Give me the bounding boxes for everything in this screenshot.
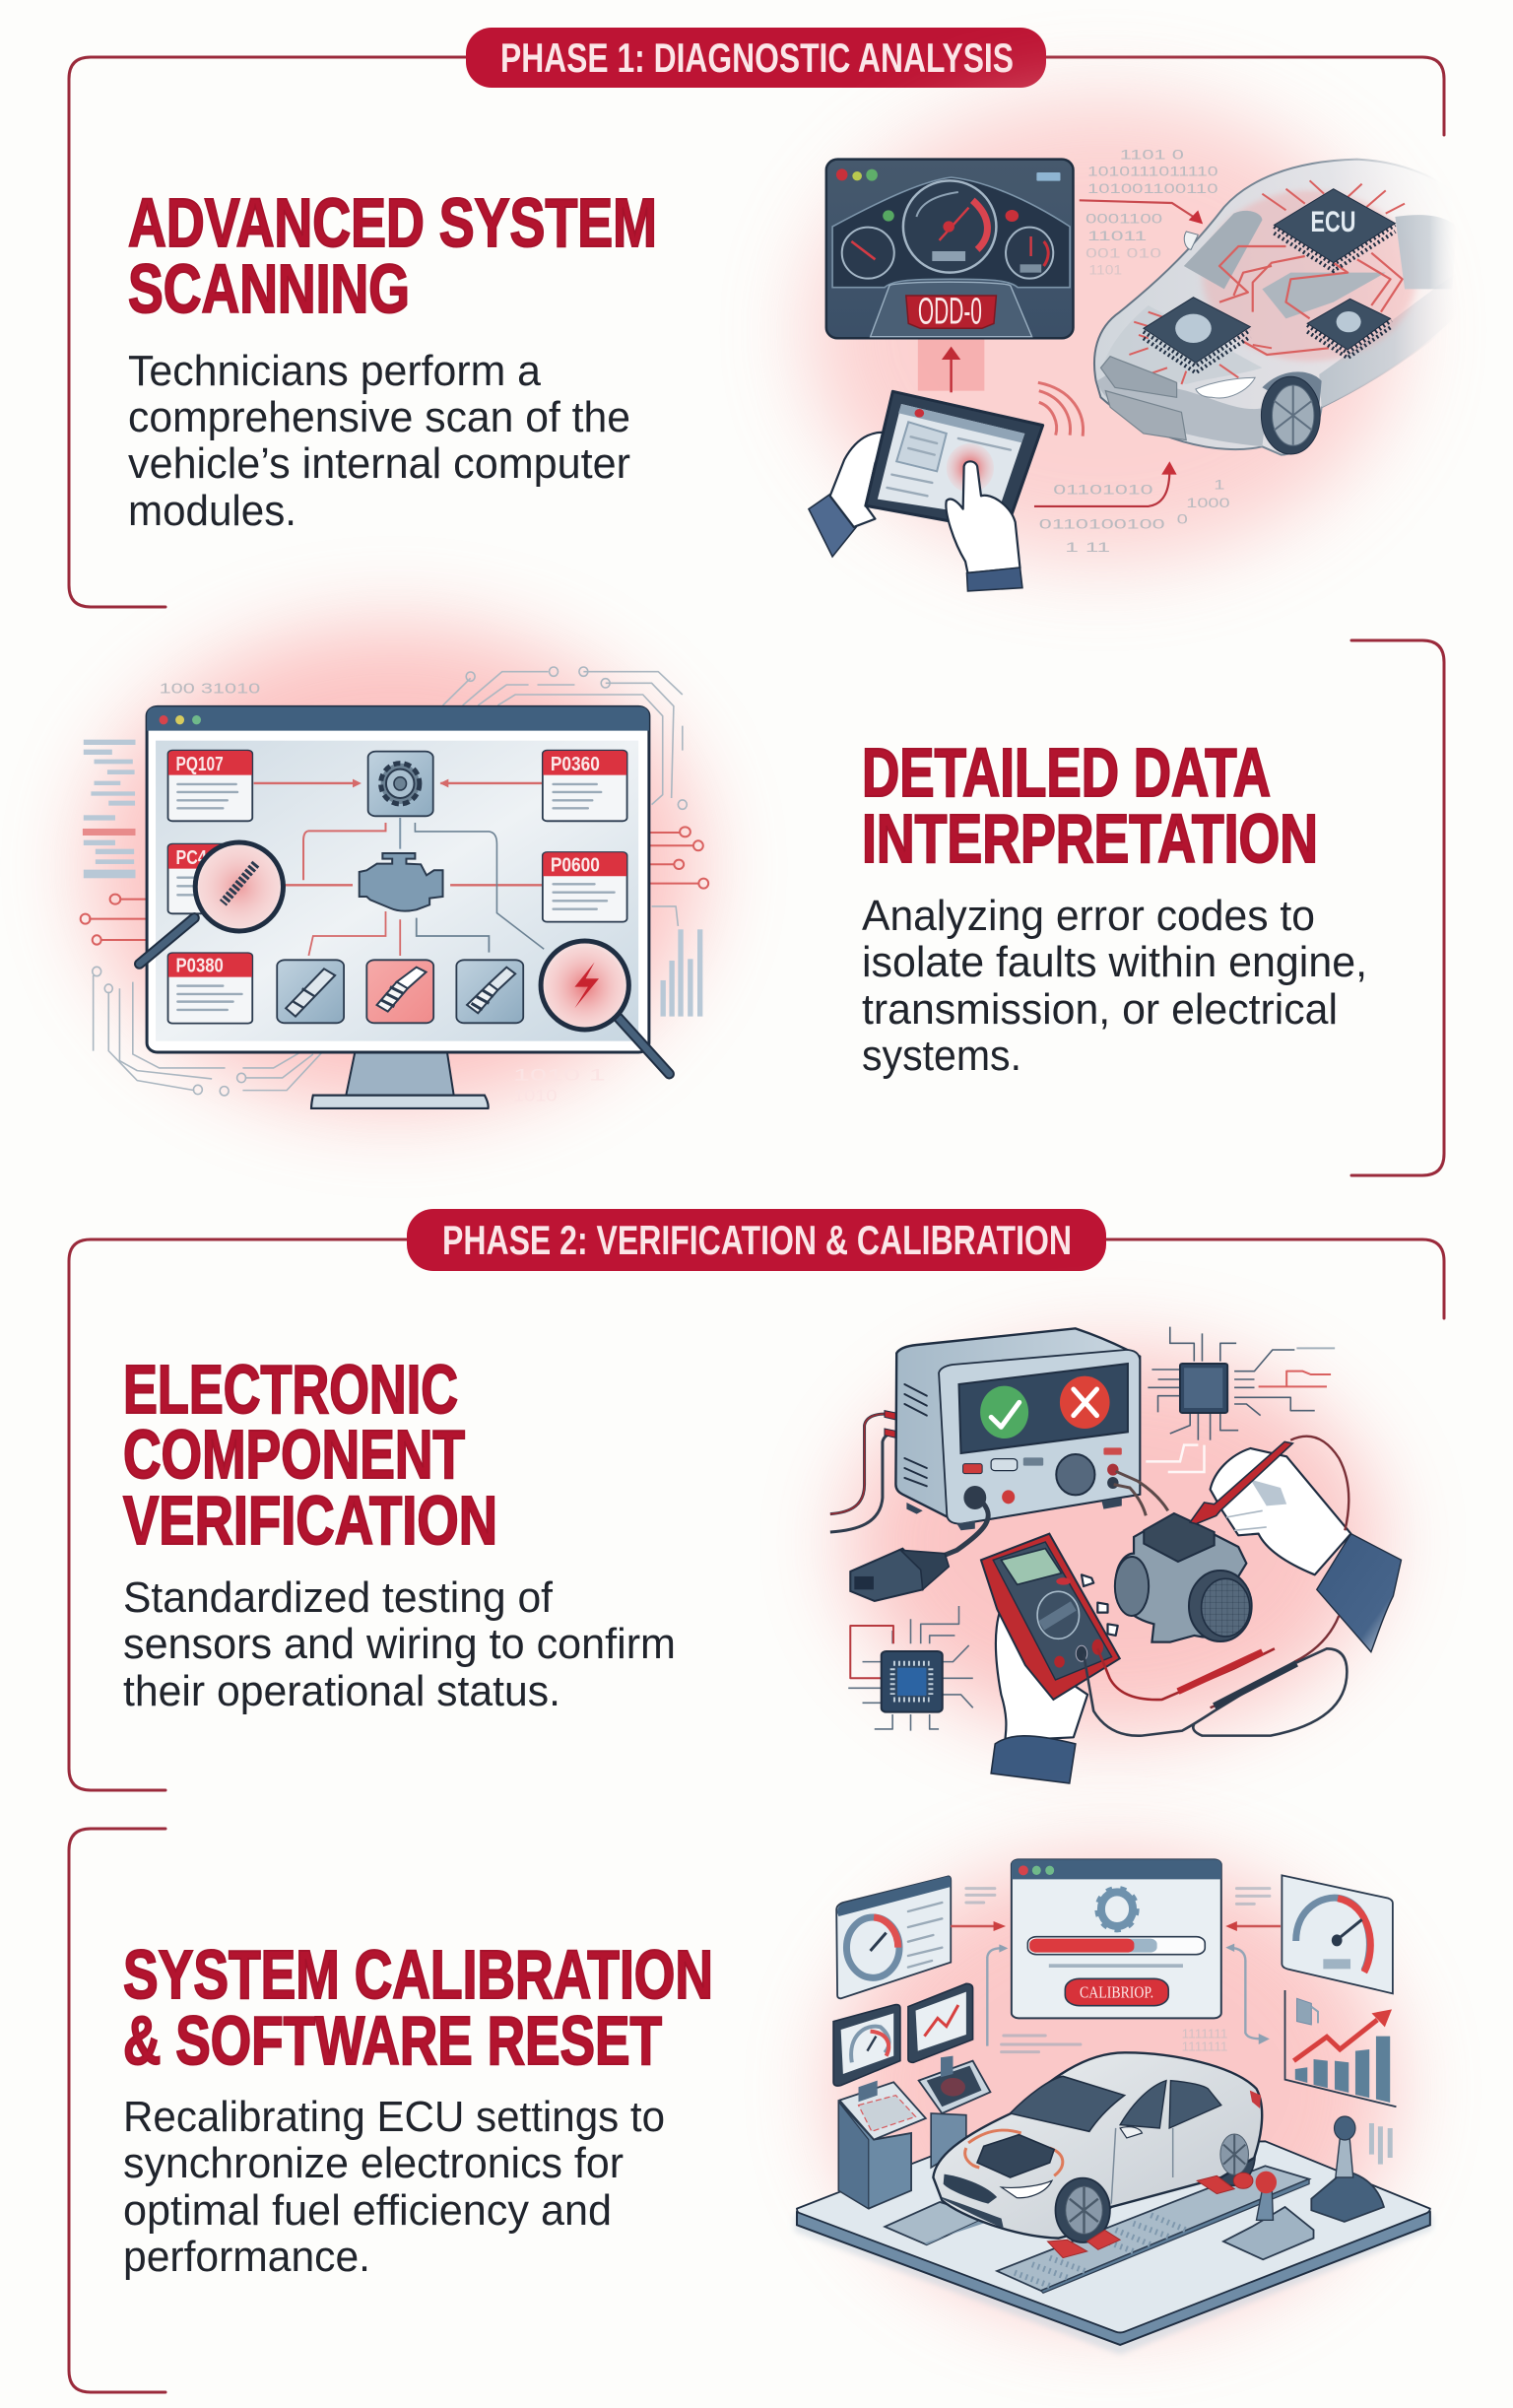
heading: system calibration and software reset: & SOFTWARE RESET <box>123 2002 662 2079</box>
ECU chips: ECU <box>1311 205 1355 237</box>
platform <box>795 2141 1432 2355</box>
binary data: 1101 0 <box>1120 147 1184 163</box>
binary data: 1000 <box>1186 495 1230 510</box>
heading: electronic component verification: COMPONENT <box>123 1416 465 1493</box>
binary text: 1010 <box>513 1087 558 1105</box>
heading: advanced system scanning <box>128 184 657 327</box>
floating dashboards and arrows: 1111111 <box>1182 2040 1227 2054</box>
phase 1 badge: PHASE 1: DIAGNOSTIC ANALYSIS <box>500 34 1014 81</box>
dashboard panel: ODD-0 <box>918 291 982 332</box>
monitor stand <box>311 1052 489 1108</box>
binary data: 0 <box>1177 511 1188 527</box>
text: calibration description: performance. <box>123 2233 370 2281</box>
text: scanning description: vehicle’s internal computer <box>128 439 630 488</box>
power plug <box>850 1501 988 1601</box>
binary data: 1010111011110 <box>1087 163 1218 179</box>
heading: advanced system scanning: ADVANCED SYSTEM <box>128 184 657 261</box>
panel: detailed data interpretation <box>81 626 1444 1175</box>
binary data: 01101010 <box>1053 482 1153 498</box>
magnifier right <box>541 941 669 1074</box>
heading: detailed data interpretation: INTERPRETATION <box>862 800 1318 877</box>
diagram connectors <box>254 779 544 956</box>
side data bars <box>83 740 702 1017</box>
car <box>1094 160 1457 455</box>
heading: advanced system scanning: SCANNING <box>128 250 410 327</box>
card P0380: P0380 <box>176 955 224 977</box>
sensor component <box>1115 1513 1252 1642</box>
heading: detailed data interpretation <box>862 734 1318 877</box>
gear icon tile <box>368 752 433 816</box>
multimeter hand <box>981 1534 1120 1783</box>
illustration: monitor with fault codes <box>81 626 708 1108</box>
binary data: 1 11 <box>1065 539 1110 555</box>
performance chart <box>1285 1990 1396 2107</box>
sensor tile 2 <box>456 960 523 1023</box>
panel frame 1 <box>69 57 1444 607</box>
card P0380 <box>168 953 252 1024</box>
panel: advanced system scanning <box>69 28 1457 607</box>
magnifier left <box>140 842 283 964</box>
sensor tile 1 <box>277 960 344 1023</box>
text: interpretation description: transmission, or electrical <box>862 985 1338 1034</box>
binary data: 1101 <box>1088 261 1122 278</box>
text: interpretation description: systems. <box>862 1032 1021 1080</box>
text: scanning description <box>128 347 630 535</box>
phase 1 badge <box>466 28 1046 88</box>
illustration: bench tester, multimeter and sensor <box>830 1327 1402 1783</box>
text: verification description: sensors and wiring to confirm <box>123 1620 676 1668</box>
phase 2 badge: PHASE 2: VERIFICATION & CALIBRATION <box>442 1217 1072 1263</box>
card P0600: P0600 <box>551 854 600 876</box>
text: interpretation description <box>862 892 1367 1080</box>
text: scanning description: Technicians perform a <box>128 347 542 395</box>
heading: electronic component verification: ELECTRONIC <box>123 1351 458 1428</box>
card partially hidden <box>168 844 230 913</box>
panel frame 4 <box>69 1829 165 2392</box>
binary text: 1010 1 <box>513 1066 606 1085</box>
ramps <box>885 2166 1309 2293</box>
text: verification description: Standardized testing of <box>123 1573 554 1622</box>
test leads <box>1084 1648 1347 1736</box>
heading: electronic component verification <box>123 1351 497 1559</box>
heading: system calibration and software reset: SYSTEM CALIBRATION <box>123 1936 713 2013</box>
card P0107: PQ107 <box>176 753 224 775</box>
text: verification description <box>123 1573 676 1715</box>
illustration: car on calibration platform <box>795 1857 1432 2355</box>
card P0360 <box>543 751 627 821</box>
circuit traces <box>81 667 708 1096</box>
floating dashboards and arrows <box>836 1875 1393 2054</box>
wheel chocks <box>1047 2173 1253 2258</box>
binary data: 11011 <box>1087 228 1147 243</box>
card P0360: P0360 <box>551 753 600 775</box>
bench tester <box>830 1328 1168 1532</box>
heading: electronic component verification: VERIFICATION <box>123 1482 497 1559</box>
dashboard panel <box>826 160 1074 338</box>
tablet with hands <box>809 391 1043 591</box>
card partially hidden: PC4 <box>176 846 207 869</box>
car <box>933 2052 1262 2242</box>
panel frame 2 <box>1351 640 1444 1175</box>
binary data <box>1039 147 1230 555</box>
binary data: 1 <box>1214 477 1224 493</box>
text: verification description: their operational status. <box>123 1667 560 1715</box>
panel frame 3 <box>69 1239 1444 1790</box>
binary text <box>160 680 606 1105</box>
text: calibration description: optimal fuel efficiency and <box>123 2186 612 2235</box>
spark plug tile <box>366 960 433 1023</box>
gear levers <box>1223 2116 1390 2259</box>
binary text: 100 31010 <box>160 680 260 697</box>
monitor <box>147 706 649 1052</box>
phase 2 badge <box>407 1209 1106 1271</box>
error code cards <box>168 751 627 1024</box>
text: calibration description <box>123 2093 665 2281</box>
heading: system calibration and software reset <box>123 1936 713 2079</box>
binary data: 0001100 <box>1085 211 1162 227</box>
panel: electronic component verification <box>69 1209 1444 1790</box>
ECU chips <box>1144 189 1395 372</box>
calibration window <box>1012 1859 1221 2018</box>
small chip bottom <box>848 1606 973 1731</box>
panel: system calibration and software reset <box>69 1829 1432 2392</box>
red arrows <box>918 200 1203 506</box>
text: calibration description: Recalibrating ECU settings to <box>123 2093 665 2141</box>
binary data: 0110100100 <box>1039 516 1165 532</box>
small chip top <box>1146 1327 1335 1472</box>
binary data: 101001100110 <box>1087 180 1218 196</box>
text: interpretation description: Analyzing error codes to <box>862 892 1315 940</box>
floating dashboards and arrows: 1111111 <box>1182 2027 1227 2041</box>
text: scanning description: modules. <box>128 487 296 535</box>
card P0600 <box>543 852 627 922</box>
engine icon <box>360 853 443 911</box>
text: interpretation description: isolate faults within engine, <box>862 938 1367 986</box>
calibration window: CALIBRIOP. <box>1080 1983 1153 2002</box>
heading: detailed data interpretation: DETAILED DATA <box>862 734 1271 811</box>
text: scanning description: comprehensive scan of the <box>128 393 630 441</box>
probe hand <box>1190 1437 1402 1707</box>
test kiosks <box>833 1983 990 2209</box>
text: calibration description: synchronize electronics for <box>123 2139 624 2187</box>
binary data: 001 010 <box>1085 245 1161 261</box>
illustration: scanner, dashboard and car ECU <box>808 99 1457 591</box>
card P0107 <box>168 751 252 821</box>
